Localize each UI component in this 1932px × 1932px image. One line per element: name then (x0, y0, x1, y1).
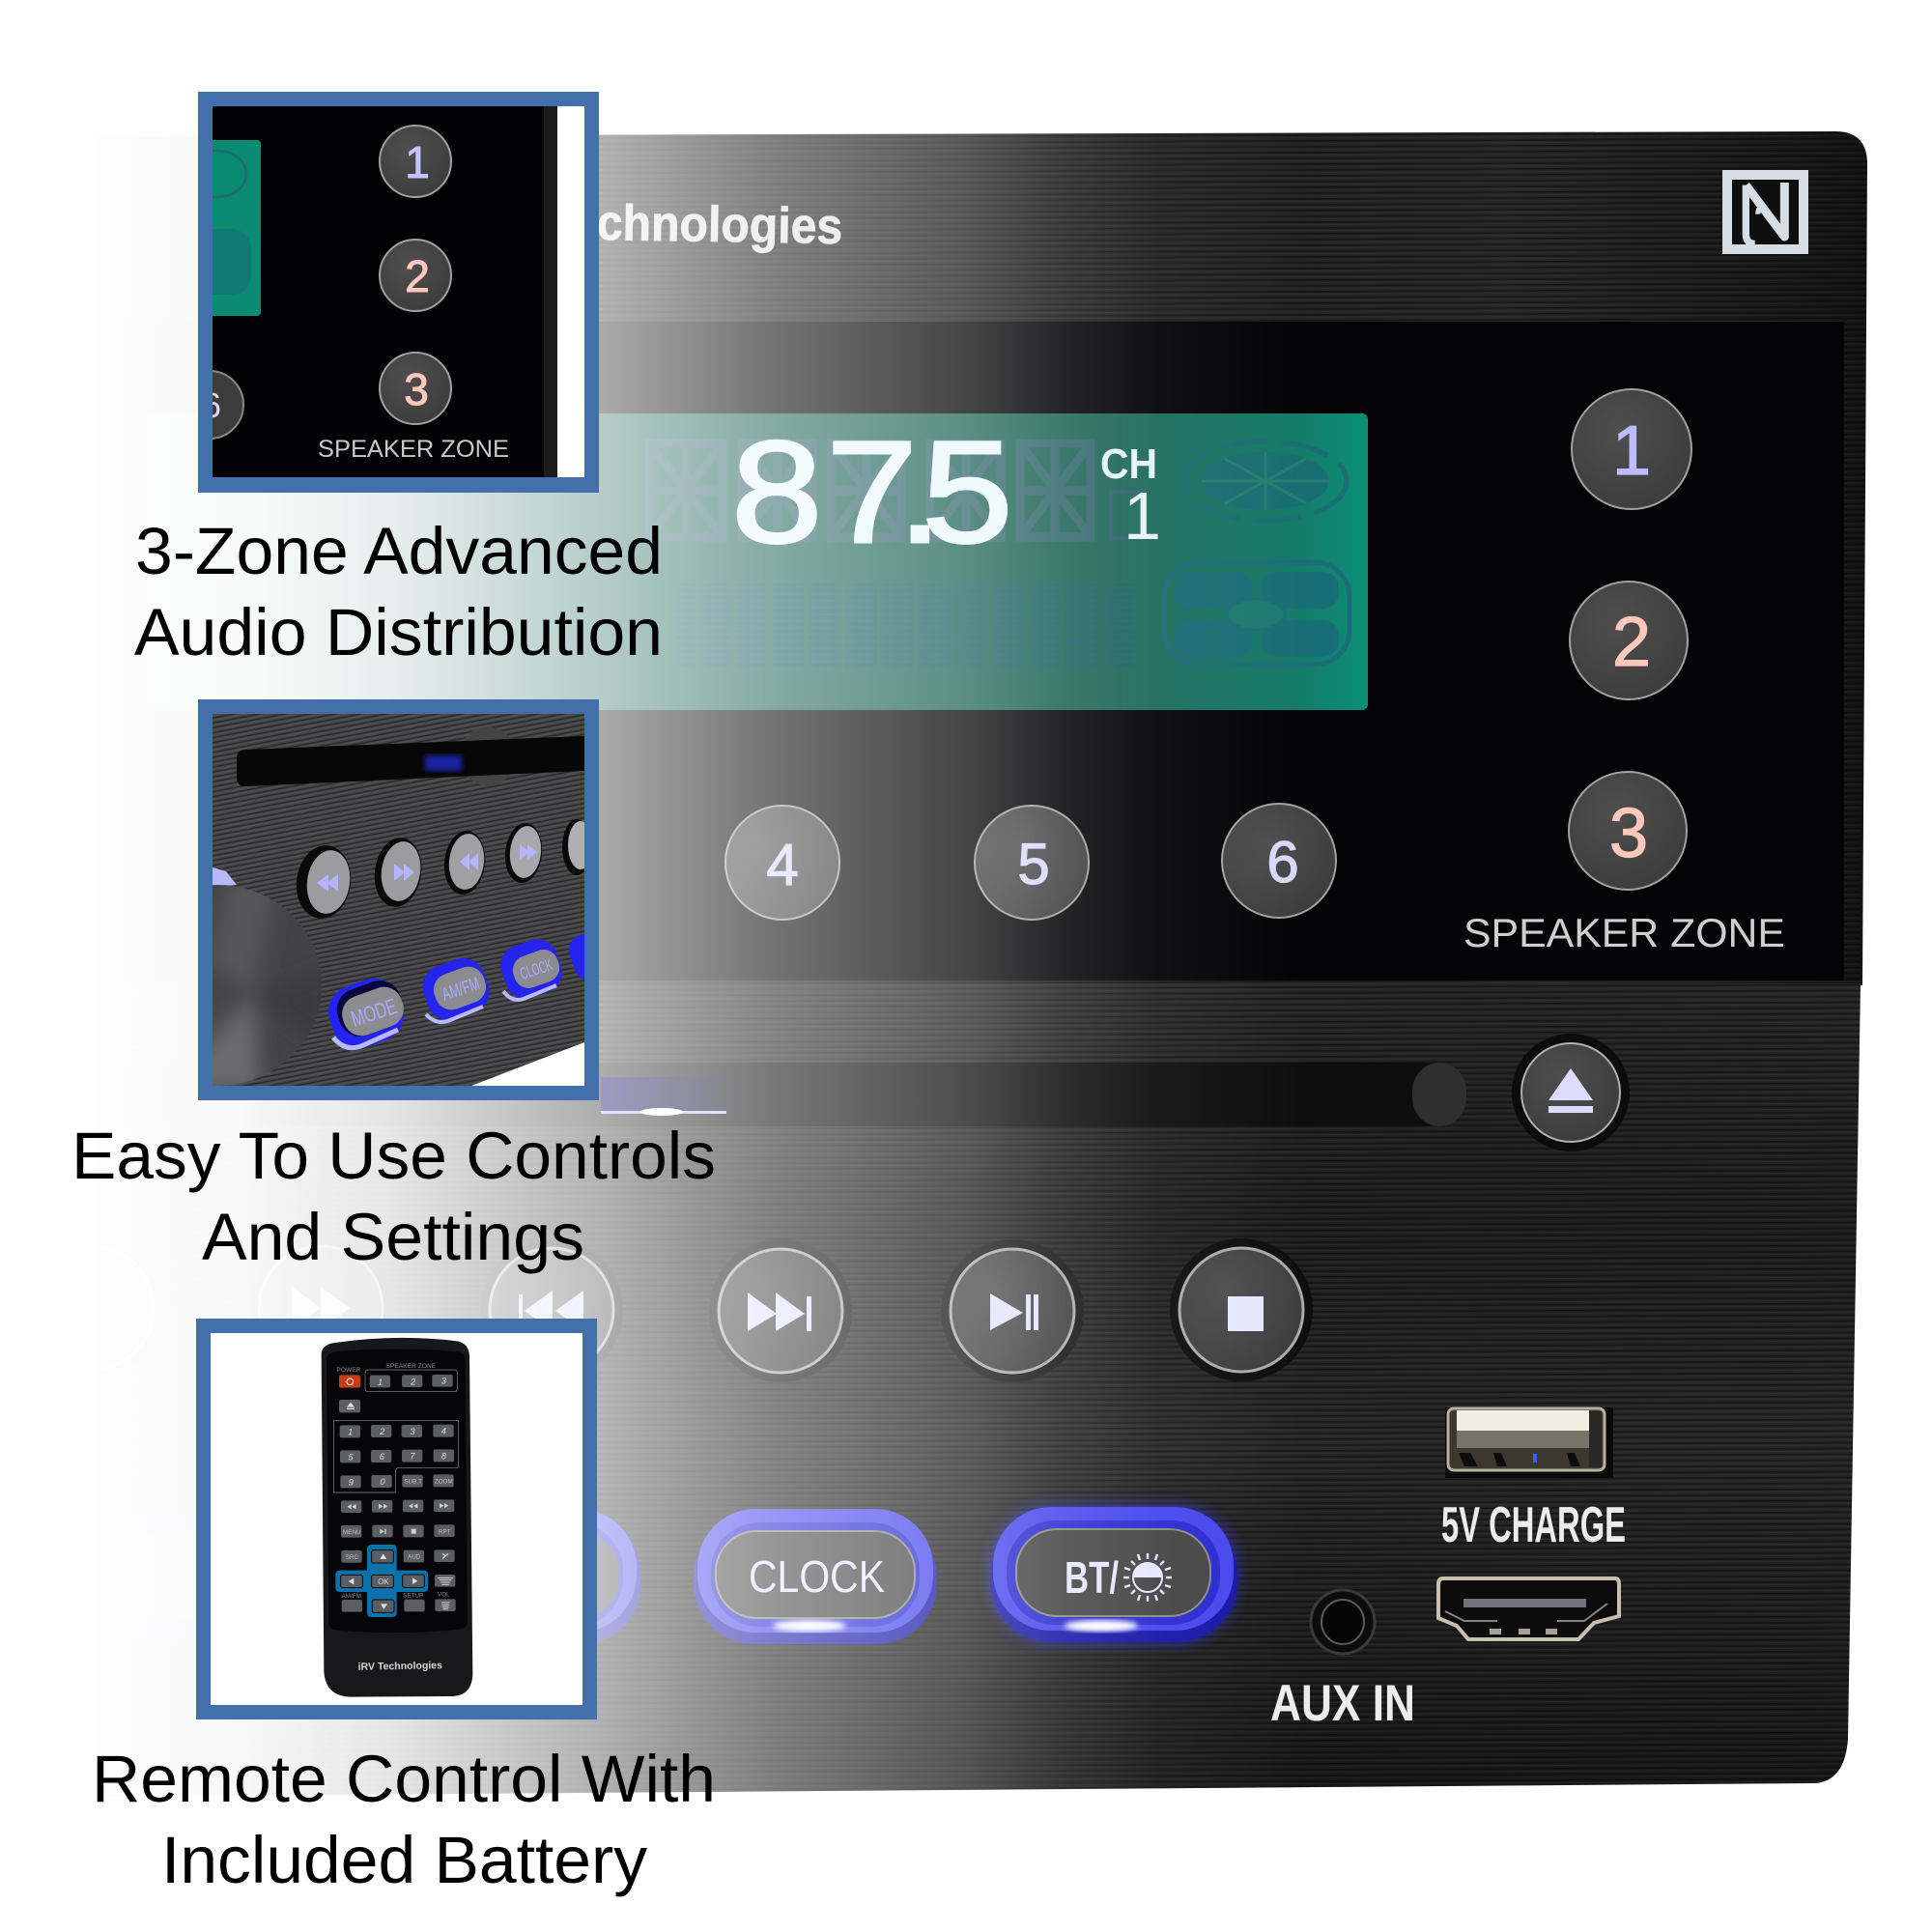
inset 1: speaker zone detail (176, 92, 599, 493)
MODE pill button (97, 1512, 333, 1643)
inset 1 photo: 2 (405, 251, 430, 301)
speaker zone group: SPEAKER ZONE (385, 1363, 437, 1370)
inset 3 frame (196, 1319, 597, 1719)
volume knob (106, 867, 333, 1092)
lower keys: SETUP (403, 1592, 423, 1599)
MODE pill (321, 971, 412, 1056)
AM/FM pill (416, 952, 496, 1027)
CD slot (535, 1063, 1466, 1126)
button 5 (975, 806, 1089, 920)
power label and button (336, 1367, 361, 1388)
zone button 3 (1569, 772, 1687, 890)
CLOCK pill: CLOCK (518, 955, 555, 983)
transport keys: MENU (343, 1529, 361, 1536)
next track button (709, 1239, 852, 1382)
LCD screen (328, 413, 1368, 710)
transport keys: AUD (408, 1554, 421, 1561)
inset 2 frame (198, 699, 599, 1100)
inset 1 photo (202, 106, 584, 477)
button 6 (1222, 804, 1336, 918)
heading: remote control: Included Battery (161, 1823, 647, 1897)
inset 2 photo (213, 714, 584, 1086)
LCD equalizer bars (790, 583, 1134, 667)
number keys: ZOOM (435, 1478, 453, 1485)
speaker zone group: 2 (410, 1377, 415, 1386)
black display panel (599, 322, 1844, 980)
d-pad: OK (378, 1577, 389, 1586)
label: aux in: AUX IN (1270, 1675, 1415, 1732)
zone button 1 (1572, 389, 1691, 509)
button 4 (725, 806, 839, 920)
previous track button (489, 1246, 622, 1364)
icon: USB port (1445, 1407, 1613, 1478)
speaker zone group: 3 (441, 1377, 446, 1386)
transport keys (341, 1499, 455, 1563)
icon: NFC logo (1727, 175, 1804, 249)
number keys: 0 (380, 1477, 385, 1487)
transport keys: SRC (346, 1554, 358, 1561)
inset 3 white background (211, 1333, 582, 1705)
CLOCK pill button (694, 1509, 937, 1644)
inset 1 frame (198, 92, 599, 493)
remote face plate (327, 1349, 468, 1633)
white fade over left of device (97, 126, 1309, 1802)
LCD frequency readout: 87.5 (731, 411, 1013, 573)
speaker zone group (365, 1363, 457, 1392)
device: head unit front panel (248, 131, 1867, 1795)
icon: HDMI port (1438, 1578, 1619, 1639)
heading: 3-zone audio (134, 514, 663, 669)
inset 2: front panel controls detail (106, 699, 626, 1100)
LCD channel digit (1109, 490, 1158, 540)
lower keys (341, 1553, 456, 1612)
brand text on device: iRV Technologies (456, 193, 843, 255)
transport keys: RPT (439, 1528, 451, 1535)
BT dimmer pill button: BT/ (1065, 1552, 1119, 1603)
zone button 2 (1570, 582, 1688, 699)
inset 3: remote control (196, 1319, 597, 1719)
LCD channel digit: 1 (1123, 478, 1161, 554)
heading: remote control: Remote Control With (92, 1742, 716, 1816)
label: 5V charge: 5V CHARGE (1441, 1497, 1626, 1553)
speaker zone group: 1 (378, 1378, 383, 1387)
number keys: 4 (441, 1427, 446, 1436)
heading: easy controls (71, 1119, 716, 1274)
d-pad (335, 1545, 428, 1617)
remote brand: iRV Technologies (358, 1660, 442, 1673)
zone button 2: 2 (1612, 604, 1651, 681)
number keys: 8 (441, 1451, 447, 1461)
button 6: 6 (1266, 830, 1299, 895)
number keys: 9 (349, 1477, 354, 1487)
power label and button: POWER (336, 1367, 361, 1374)
heading: 3-zone audio: Audio Distribution (134, 595, 663, 669)
heading: easy controls: And Settings (202, 1200, 584, 1274)
number keys: 1 (348, 1427, 353, 1436)
upper housing (599, 131, 1867, 985)
eject button (1512, 1034, 1630, 1151)
LCD car speakers icon (1164, 562, 1350, 665)
icon: aux jack (1311, 1590, 1375, 1654)
eject key (339, 1400, 360, 1412)
speaker zone label: SPEAKER ZONE (1463, 910, 1785, 955)
button 4: 4 (766, 833, 799, 897)
remote control (322, 1338, 472, 1697)
zone button 3: 3 (1609, 795, 1648, 872)
rewind button (20, 1236, 163, 1379)
CLOCK pill button: CLOCK (749, 1551, 885, 1602)
AM/FM pill button (404, 1509, 640, 1644)
number keys: 3 (410, 1427, 415, 1436)
number keys (334, 1421, 458, 1492)
number keys: SUB.T (404, 1479, 422, 1486)
inset 1 photo: 3 (404, 364, 429, 414)
lower keys: AM/FM (341, 1593, 361, 1600)
button 5: 5 (1017, 832, 1050, 896)
inset 1 photo: 6 (202, 385, 221, 425)
LCD channel label: CH (1100, 440, 1157, 488)
control buttons (292, 819, 593, 923)
stop button (1170, 1238, 1313, 1381)
MODE pill: MODE (348, 993, 400, 1032)
zone button 1: 1 (1612, 412, 1651, 490)
number keys: 2 (379, 1427, 385, 1436)
play pause button (941, 1239, 1084, 1382)
clipped pill (564, 924, 626, 984)
inset 1 photo: SPEAKER ZONE (318, 436, 509, 463)
number keys: 6 (380, 1452, 385, 1462)
AM/FM pill: AM/FM (440, 974, 482, 1006)
lower keys: VOL (438, 1592, 450, 1599)
fast forward button (292, 1244, 384, 1319)
number keys: 5 (348, 1452, 354, 1462)
icon: brightness sun (1123, 1553, 1172, 1602)
slot blue glow (601, 1077, 751, 1116)
heading: 3-zone audio: 3-Zone Advanced (135, 514, 663, 588)
remote body (322, 1338, 472, 1697)
number keys: 7 (410, 1452, 415, 1462)
LCD ghost segments (649, 443, 1091, 537)
heading: remote control (92, 1742, 716, 1897)
lower housing (92, 983, 1861, 1797)
BT dimmer pill button (987, 1503, 1240, 1646)
heading: easy controls: Easy To Use Controls (71, 1119, 716, 1193)
inset 1 photo: 1 (405, 137, 430, 187)
CLOCK pill (495, 933, 568, 1005)
LCD disc icon (1184, 441, 1347, 521)
brushed metal texture (755, 131, 1867, 1789)
